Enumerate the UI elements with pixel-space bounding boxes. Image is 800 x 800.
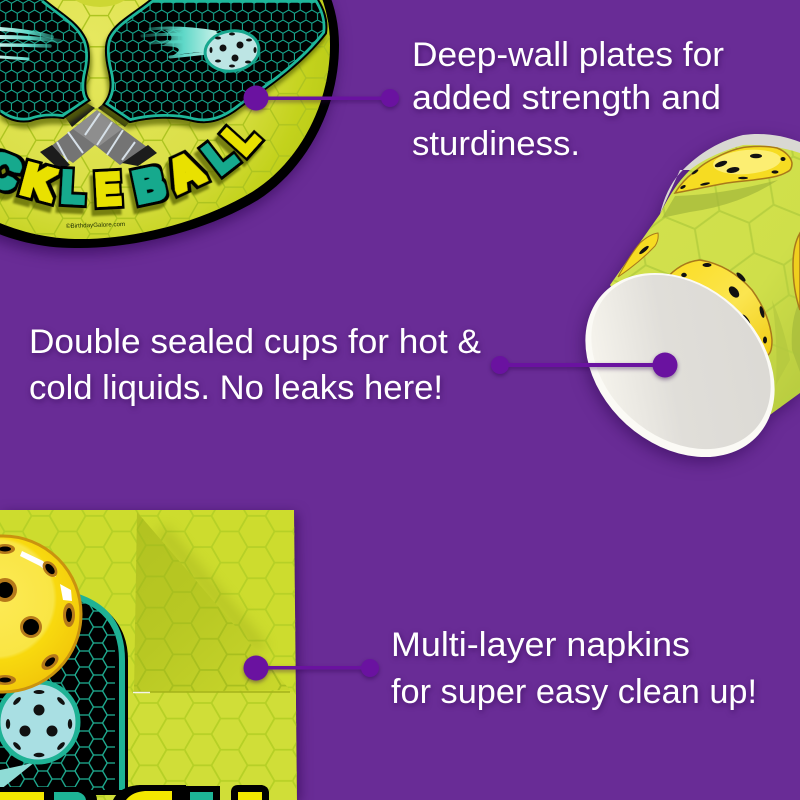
cup rim: [660, 134, 800, 214]
napkin sheet: [0, 510, 297, 800]
cup top ball: [675, 146, 792, 193]
napkin fold flap: [133, 512, 290, 692]
napkin paddle: [0, 588, 128, 795]
text: plate callout: added strength and: [412, 79, 721, 117]
copyright: ©BirthdayGalore.com: [66, 221, 125, 230]
paddle ball trail: [142, 28, 218, 57]
text: cup callout: [29, 323, 481, 407]
connector: plate callout: [244, 86, 399, 110]
text: plate callout: sturdiness.: [412, 125, 580, 163]
text: napkin callout: for super easy clean up!: [391, 673, 757, 711]
text: plate callout: Deep-wall plates for: [412, 36, 724, 74]
plate lettering: L: [60, 162, 86, 212]
plate lettering: [0, 113, 267, 214]
text: plate callout: [412, 36, 724, 163]
plate lettering: B: [130, 158, 169, 212]
napkin yellow ball: [0, 536, 81, 692]
napkin teal ball: [0, 682, 78, 790]
plate lettering: K: [17, 155, 61, 210]
plate: [0, 0, 339, 248]
cup middle ball: [665, 260, 772, 355]
text: napkin callout: Multi-layer napkins: [391, 626, 690, 664]
cup base: [548, 235, 800, 495]
cup body: [610, 145, 800, 420]
cup: [548, 134, 800, 495]
left paddle: [0, 0, 95, 125]
plate lettering: A: [161, 143, 210, 201]
cup small ball: [618, 233, 658, 277]
plate lettering: E: [94, 164, 122, 214]
paddle handles: [40, 100, 157, 170]
connector: cup callout: [491, 352, 678, 378]
text: cup callout: cold liquids. No leaks here!: [29, 369, 443, 407]
plate lettering: L: [215, 113, 267, 163]
plate rim and surface: [0, 0, 339, 248]
right paddle: [100, 0, 330, 125]
connector: napkin callout: [244, 656, 379, 680]
text: napkin callout: [391, 626, 757, 711]
text: cup callout: Double sealed cups for hot &: [29, 323, 481, 361]
top ball behind paddles: [68, 0, 132, 7]
napkin lettering tops: [0, 785, 269, 800]
napkin: [0, 510, 297, 800]
paddle ball: [202, 27, 262, 75]
plate lettering: L: [195, 129, 244, 182]
cup right ball: [793, 233, 800, 310]
